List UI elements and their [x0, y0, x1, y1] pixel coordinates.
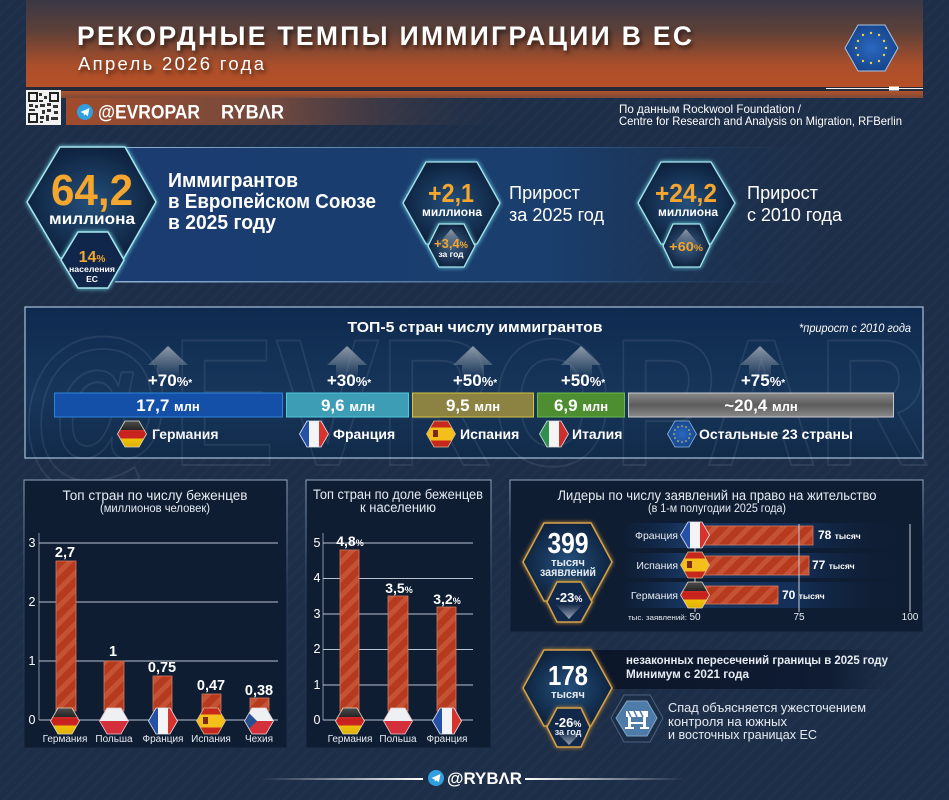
bar: Germany [54, 346, 282, 448]
bar chart: 2 [29, 595, 36, 609]
panel: refugees by number: (миллионов человек) [100, 503, 210, 515]
subtitle: Апрель 2026 года [78, 53, 265, 74]
bar chart: 3 [314, 607, 321, 621]
bar chart: 0 [314, 713, 321, 727]
bar chart: Франция [143, 734, 183, 745]
stat: 178 thousand: 178 [548, 660, 588, 691]
bar chart: 100 [902, 612, 919, 623]
bar chart: тыс. заявлений: [628, 613, 687, 622]
text: growth 2025: за 2025 год [509, 204, 604, 225]
stat: 64,2 million [27, 147, 156, 288]
text: growth since 2010: Прирост [747, 182, 819, 203]
bar: other 23 countries: Остальные 23 страны [699, 426, 853, 442]
bar chart: Германия [43, 734, 87, 745]
icon: telegram footer [428, 770, 444, 786]
bar chart: 3 [29, 536, 36, 550]
bar chart: Чехия [245, 734, 273, 745]
stat: 178 thousand: за год [555, 727, 582, 737]
text: immigrants in EU: в 2025 году [168, 211, 277, 234]
stat: +24,2 million: +24,2 [655, 178, 717, 208]
text: explanation: Спад объясняется ужесточением [668, 700, 866, 715]
stat: +2,1 million: +2,1 [428, 178, 474, 208]
bar chart: 3,5% [385, 580, 413, 596]
bar chart: 1 [29, 654, 36, 668]
stat: 64,2 million: ЕС [86, 274, 98, 284]
bar chart: Франция [635, 530, 678, 542]
bar chart: 70 тысяч [782, 588, 825, 602]
bar: Germany: +70%* [148, 371, 192, 390]
bar chart [625, 522, 919, 623]
icon: border barrier [611, 695, 663, 742]
bar chart: 0,38 [245, 683, 273, 699]
bar chart: 1 [109, 644, 117, 660]
bar chart: Польша [95, 734, 133, 745]
bar chart: 78 тысяч [818, 528, 861, 542]
bar: France: Франция [333, 426, 395, 442]
panel: top 5 countries [20, 302, 930, 504]
source note: Centre for Research and Analysis on Migration, RFBerlin [619, 114, 902, 128]
heading: Топ стран по доле беженцев [313, 487, 483, 502]
note: *прирост с 2010 года [799, 323, 911, 335]
text: growth since 2010: с 2010 года [747, 204, 843, 225]
callout strip: Минимум с 2021 года [626, 667, 749, 681]
bar chart: Германия [631, 590, 678, 602]
bar chart: Германия [328, 734, 372, 745]
header banner [26, 0, 923, 98]
text: growth since 2010 [747, 182, 843, 225]
bar chart: Польша [379, 734, 417, 745]
stat: 399 thousand: 399 [548, 528, 588, 560]
stat: 64,2 million: миллиона [49, 211, 135, 228]
heading: Лидеры по числу заявлений на право на жительство [558, 488, 876, 503]
handle: @EVROPAR [98, 102, 200, 124]
bar: Spain: Испания [460, 426, 519, 442]
stat: 399 thousand: тысяч [551, 557, 585, 569]
stat: 399 thousand: заявлений [540, 567, 596, 579]
callout strip [590, 650, 910, 689]
bar chart: 2,7 [55, 545, 75, 561]
icon: EU hexagon [845, 25, 898, 71]
bar chart: 4,8% [336, 533, 364, 549]
panel: illegal border crossings [523, 650, 910, 747]
bar chart: 2 [314, 642, 321, 656]
panel: residence applications: (в 1-м полугодии 2025 года) [648, 503, 786, 515]
title: РЕКОРДНЫЕ ТЕМПЫ ИММИГРАЦИИ В ЕС [77, 21, 692, 51]
bar chart: 75 [793, 612, 805, 623]
stat: 178 thousand [523, 650, 612, 747]
panel: refugees share [306, 480, 491, 748]
bar chart: 77 тысяч [812, 558, 855, 572]
source note: По данным Rockwool Foundation / [619, 102, 802, 116]
stat: +2,1 million: +3,4% [434, 237, 468, 251]
stat: 178 thousand: тысяч [551, 689, 585, 701]
bar: Germany: Германия [152, 426, 219, 442]
text: immigrants in EU: в Европейском Союзе [168, 190, 376, 213]
bar: France: +30%* [327, 371, 371, 390]
bar: France [286, 346, 408, 447]
stat: +24,2 million: миллиона [658, 207, 719, 219]
bar chart: 4 [314, 571, 321, 585]
stat: +2,1 million: миллиона [422, 207, 483, 219]
bar: other 23 countries: ~20,4 млн [724, 396, 798, 415]
channel strip [66, 98, 536, 125]
bar chart: 0 [29, 713, 36, 727]
text: immigrants in EU: Иммигрантов [168, 169, 298, 192]
bar chart: 1 [314, 678, 321, 692]
bar chart [314, 533, 473, 745]
bar: Italy: Италия [572, 426, 622, 442]
bar chart: Испания [636, 560, 678, 572]
text: explanation: контроля на южных [668, 714, 788, 729]
footer logo [260, 770, 685, 788]
bar chart: Испания [191, 734, 231, 745]
bar: France: 9,6 млн [321, 396, 375, 415]
bar: Italy: 6,9 млн [554, 396, 608, 415]
bar: Spain: 9,5 млн [446, 396, 500, 415]
stat: 64,2 million: населения [69, 264, 115, 274]
panel: key figures [27, 147, 843, 288]
callout strip: незаконных пересечений границы в 2025 году [626, 653, 888, 667]
stat: +24,2 million: +60 % [669, 239, 703, 254]
bar: other 23 countries: +75%* [741, 371, 785, 390]
bar chart: 5 [314, 536, 321, 550]
stat: +2,1 million: за год [438, 249, 464, 259]
stat: +24,2 million [638, 162, 735, 267]
bar chart: 0,75 [148, 660, 176, 676]
text: explanation [668, 700, 866, 742]
stat: 64,2 million: 64,2 [51, 166, 133, 215]
bar: Italy: +50%* [561, 371, 605, 390]
stat: +2,1 million [403, 162, 500, 267]
text: growth 2025: Прирост [509, 182, 581, 203]
stat: 178 thousand: -26% [555, 715, 581, 730]
bar chart: 3,2% [433, 591, 461, 607]
bar: Spain: +50%* [453, 371, 497, 390]
bar: Germany: 17,7 млн [136, 396, 200, 415]
logo: RYBΛR [221, 102, 284, 124]
bar chart: 50 [689, 612, 701, 623]
bar chart: 0,47 [197, 678, 225, 694]
text: explanation: и восточных границах ЕС [668, 727, 817, 742]
source note [619, 102, 902, 128]
text: immigrants in EU [168, 169, 376, 234]
panel: residence applications [510, 480, 923, 632]
heading: Топ стран по числу беженцев [62, 488, 248, 503]
text: growth 2025 [509, 182, 604, 225]
heading: ТОП-5 стран числу иммигрантов [348, 319, 602, 336]
bar chart: Франция [427, 734, 467, 745]
bar chart [29, 533, 278, 745]
stat: 64,2 million: 14% [79, 249, 105, 266]
bar: Spain [412, 346, 534, 447]
footer logo: @RYBΛR [447, 770, 522, 788]
panel: refugees by number [24, 480, 287, 748]
stat: 399 thousand [523, 523, 612, 622]
stat: 399 thousand: -23% [556, 590, 582, 605]
icon: telegram [77, 104, 93, 120]
bar: other 23 countries [628, 346, 894, 447]
panel: refugees share: к населению [360, 500, 436, 515]
QR code [26, 90, 61, 125]
bar: Italy [538, 346, 624, 447]
